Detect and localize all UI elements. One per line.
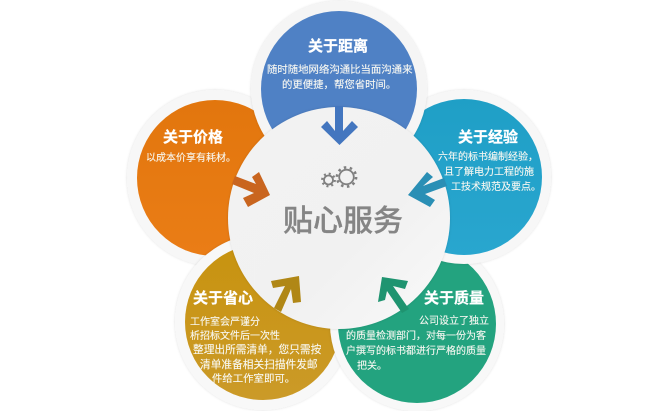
heading: distance: 关于距离 [308, 37, 368, 55]
text: quality body: 户撰写的标书都进行严格的质量 [346, 344, 486, 357]
text: saving body: 析招标文件后一次性 [190, 329, 280, 342]
text: experience body: 六年的标书编制经验， [438, 150, 538, 163]
panel: saving (gold) [175, 234, 351, 410]
text: price body: 以成本价享有耗材。 [146, 151, 236, 164]
text: saving body: 清单准备相关扫描件发邮 [200, 358, 318, 371]
text: quality body: 公司设立了独立 [419, 314, 489, 327]
panel: center circle [228, 107, 450, 329]
text: distance body: 的更便捷，帮您省时间。 [282, 78, 396, 91]
text: saving body: 整理出所需清单，您只需按 [193, 343, 322, 356]
arrow: green [378, 277, 409, 313]
icon: gears [322, 167, 356, 187]
arrow: teal [408, 172, 447, 207]
arrow: gold [271, 276, 301, 312]
text: distance body: 随时随地网络沟通比当面沟通来 [267, 63, 413, 76]
panel: experience (teal) [377, 90, 551, 264]
text: experience body [438, 150, 541, 193]
text: quality body: 把关。 [357, 359, 387, 372]
panel: distance (blue) [251, 1, 427, 177]
text: saving body: 件给工作室即可。 [212, 372, 295, 385]
panel: price (orange) [127, 90, 303, 266]
heading: quality: 关于质量 [424, 289, 484, 307]
text: quality body [346, 314, 489, 372]
heading: price: 关于价格 [163, 128, 223, 146]
heading: experience: 关于经验 [458, 128, 518, 146]
text: saving body [190, 315, 322, 385]
text: distance body [267, 63, 413, 91]
text: experience body: 且了解电力工程的施 [444, 165, 534, 178]
text: saving body: 工作室会严谨分 [190, 315, 260, 328]
heading: saving: 关于省心 [193, 290, 253, 307]
text: experience body: 工技术规范及要点。 [451, 180, 541, 193]
arrow: orange [232, 172, 270, 207]
title: center: 贴心服务 [283, 205, 403, 238]
arrow: blue [321, 106, 358, 145]
panel: quality (green) [330, 237, 504, 411]
text: quality body: 的质量检测部门，对每一份为客 [346, 329, 486, 342]
